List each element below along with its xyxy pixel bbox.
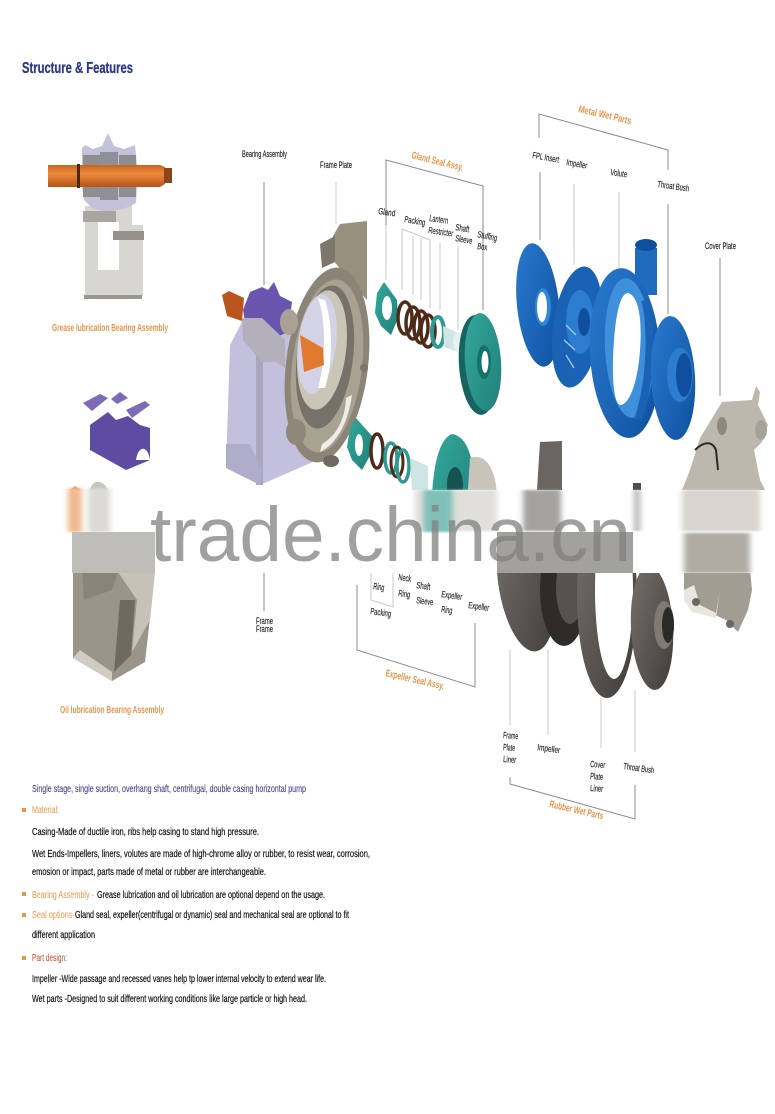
bullet: material: Material:: [32, 805, 59, 816]
labels: rubber wet parts: Impeller: [537, 742, 561, 755]
labels: rubber wet parts: [503, 650, 655, 794]
illustration: gland seal assembly parts: [375, 282, 504, 416]
bullet: seal options: Seal options-: [32, 909, 75, 921]
labels: gland seal parts: Lantern: [429, 213, 449, 226]
bullet: bearing assembly: [22, 889, 325, 901]
bullet: part design: Part design:: [32, 953, 67, 964]
labels: expeller seal parts: Shaft: [416, 580, 431, 592]
heading and bracket: metal wet parts: [539, 104, 668, 170]
labels: expeller seal parts: Packing: [370, 606, 392, 619]
heading and bracket: expeller seal assy: Expeller Seal Assy.: [384, 668, 445, 692]
labels: expeller seal parts: Ring: [441, 604, 453, 616]
heading and bracket: metal wet parts: Metal Wet Parts: [577, 104, 633, 127]
labels: gland seal parts: Shaft: [455, 222, 471, 234]
illustration: oil lubrication bearing assembly: [70, 392, 155, 681]
labels: metal wet parts: Throat Bush: [657, 179, 690, 193]
labels: expeller seal parts: Expeller: [441, 589, 463, 602]
text block: features: Single stage, single suction, overhang shaft, centrifugal, double casing horizontal pump: [32, 783, 306, 795]
illustration: rubber wet parts: [488, 441, 676, 698]
labels: metal wet parts: Impeller: [566, 157, 588, 171]
heading and bracket: expeller seal assy: [357, 585, 475, 692]
text block: features: Impeller -Wide passage and recessed vanes help tp lower internal velocity to extend wear life.: [32, 973, 326, 985]
labels: rubber wet parts: Liner: [503, 754, 517, 765]
label: cover plate: Cover Plate: [705, 241, 736, 251]
labels: gland seal parts: Gland: [378, 206, 396, 218]
illustration: metal wet parts in blue: [511, 239, 698, 441]
text block: features: Casing-Made of ductile iron, ribs help casing to stand high pressure.: [32, 826, 259, 838]
illustration: cover plate: [682, 386, 768, 632]
labels: expeller seal parts: Sleeve: [416, 595, 434, 607]
labels: expeller seal parts: Ring: [398, 588, 411, 600]
label: frame: Frame: [256, 624, 273, 634]
text block: features: [22, 783, 370, 1005]
labels: gland seal parts: Packing: [404, 214, 426, 228]
labels: expeller seal parts: [370, 572, 490, 619]
labels: rubber wet parts: Plate: [503, 742, 516, 753]
label: bearing assembly: [242, 149, 287, 285]
labels: rubber wet parts: Cover: [590, 759, 606, 770]
label: grease lubrication: Grease lubrication Bearing Assembly: [52, 323, 168, 334]
labels: expeller seal parts: Expeller: [468, 600, 490, 613]
labels: expeller seal parts: Neck: [398, 572, 412, 584]
title: Structure & Features: [22, 60, 133, 77]
illustration: expeller seal assembly parts: [347, 418, 497, 534]
labels: metal wet parts: [532, 150, 690, 314]
labels: gland seal parts: [378, 206, 498, 330]
labels: gland seal parts: Restricter: [428, 225, 454, 238]
labels: gland seal parts: Box: [477, 241, 488, 252]
bullet: bearing assembly: Bearing Assembly -: [32, 889, 94, 901]
labels: rubber wet parts: Throat Bush: [623, 761, 655, 775]
labels: rubber wet parts: Plate: [590, 771, 604, 782]
text block: features: Wet parts -Designed to suit different working conditions like large particle or high head.: [32, 993, 307, 1005]
heading and bracket: rubber wet parts: Rubber Wet Parts: [548, 799, 605, 822]
label: oil lubrication: Oil lubrication Bearing Assembly: [60, 705, 164, 716]
labels: metal wet parts: Volute: [610, 167, 628, 179]
heading and bracket: rubber wet parts: [510, 777, 635, 822]
bullet: seal options: Gland seal, expeller(centrifugal or dynamic) seal and mechanical seal are optional to fit: [75, 909, 349, 921]
watermark blur band: [0, 488, 775, 573]
bullet: seal options: [22, 909, 349, 921]
illustration: grease lubrication bearing assembly: [48, 133, 172, 299]
labels: gland seal parts: Sleeve: [455, 233, 473, 246]
label: frame plate: [320, 160, 352, 224]
labels: metal wet parts: FPL Insert: [532, 150, 560, 165]
labels: gland seal parts: Stuffing: [477, 229, 498, 243]
labels: expeller seal parts: Ring: [373, 581, 385, 593]
text block: features: different application: [32, 929, 95, 941]
watermark text: trade.china.cn: [150, 492, 631, 578]
label: frame: Frame: [256, 616, 273, 626]
label: bearing assembly: Bearing Assembly: [242, 149, 287, 159]
labels: rubber wet parts: Liner: [590, 783, 604, 794]
bullet: part design: [22, 953, 67, 964]
text block: features: emosion or impact, parts made of metal or rubber are interchangeable.: [32, 866, 266, 878]
label: frame: [256, 573, 273, 634]
labels: rubber wet parts: Frame: [503, 730, 519, 741]
bullet: material: [22, 805, 59, 816]
heading and bracket: gland seal assy: Gland Seal Assy.: [410, 150, 464, 174]
illustration: main frame and frame plate: [222, 221, 380, 485]
label: frame plate: Frame Plate: [320, 160, 352, 170]
bullet: bearing assembly: Grease lubrication and oil lubrication are optional depend on the usage.: [97, 889, 325, 901]
text block: features: Wet Ends-Impellers, liners, volutes are made of high-chrome alloy or rubber, to resist wear, corrosion,: [32, 848, 370, 860]
heading and bracket: gland seal assy: [386, 150, 483, 310]
